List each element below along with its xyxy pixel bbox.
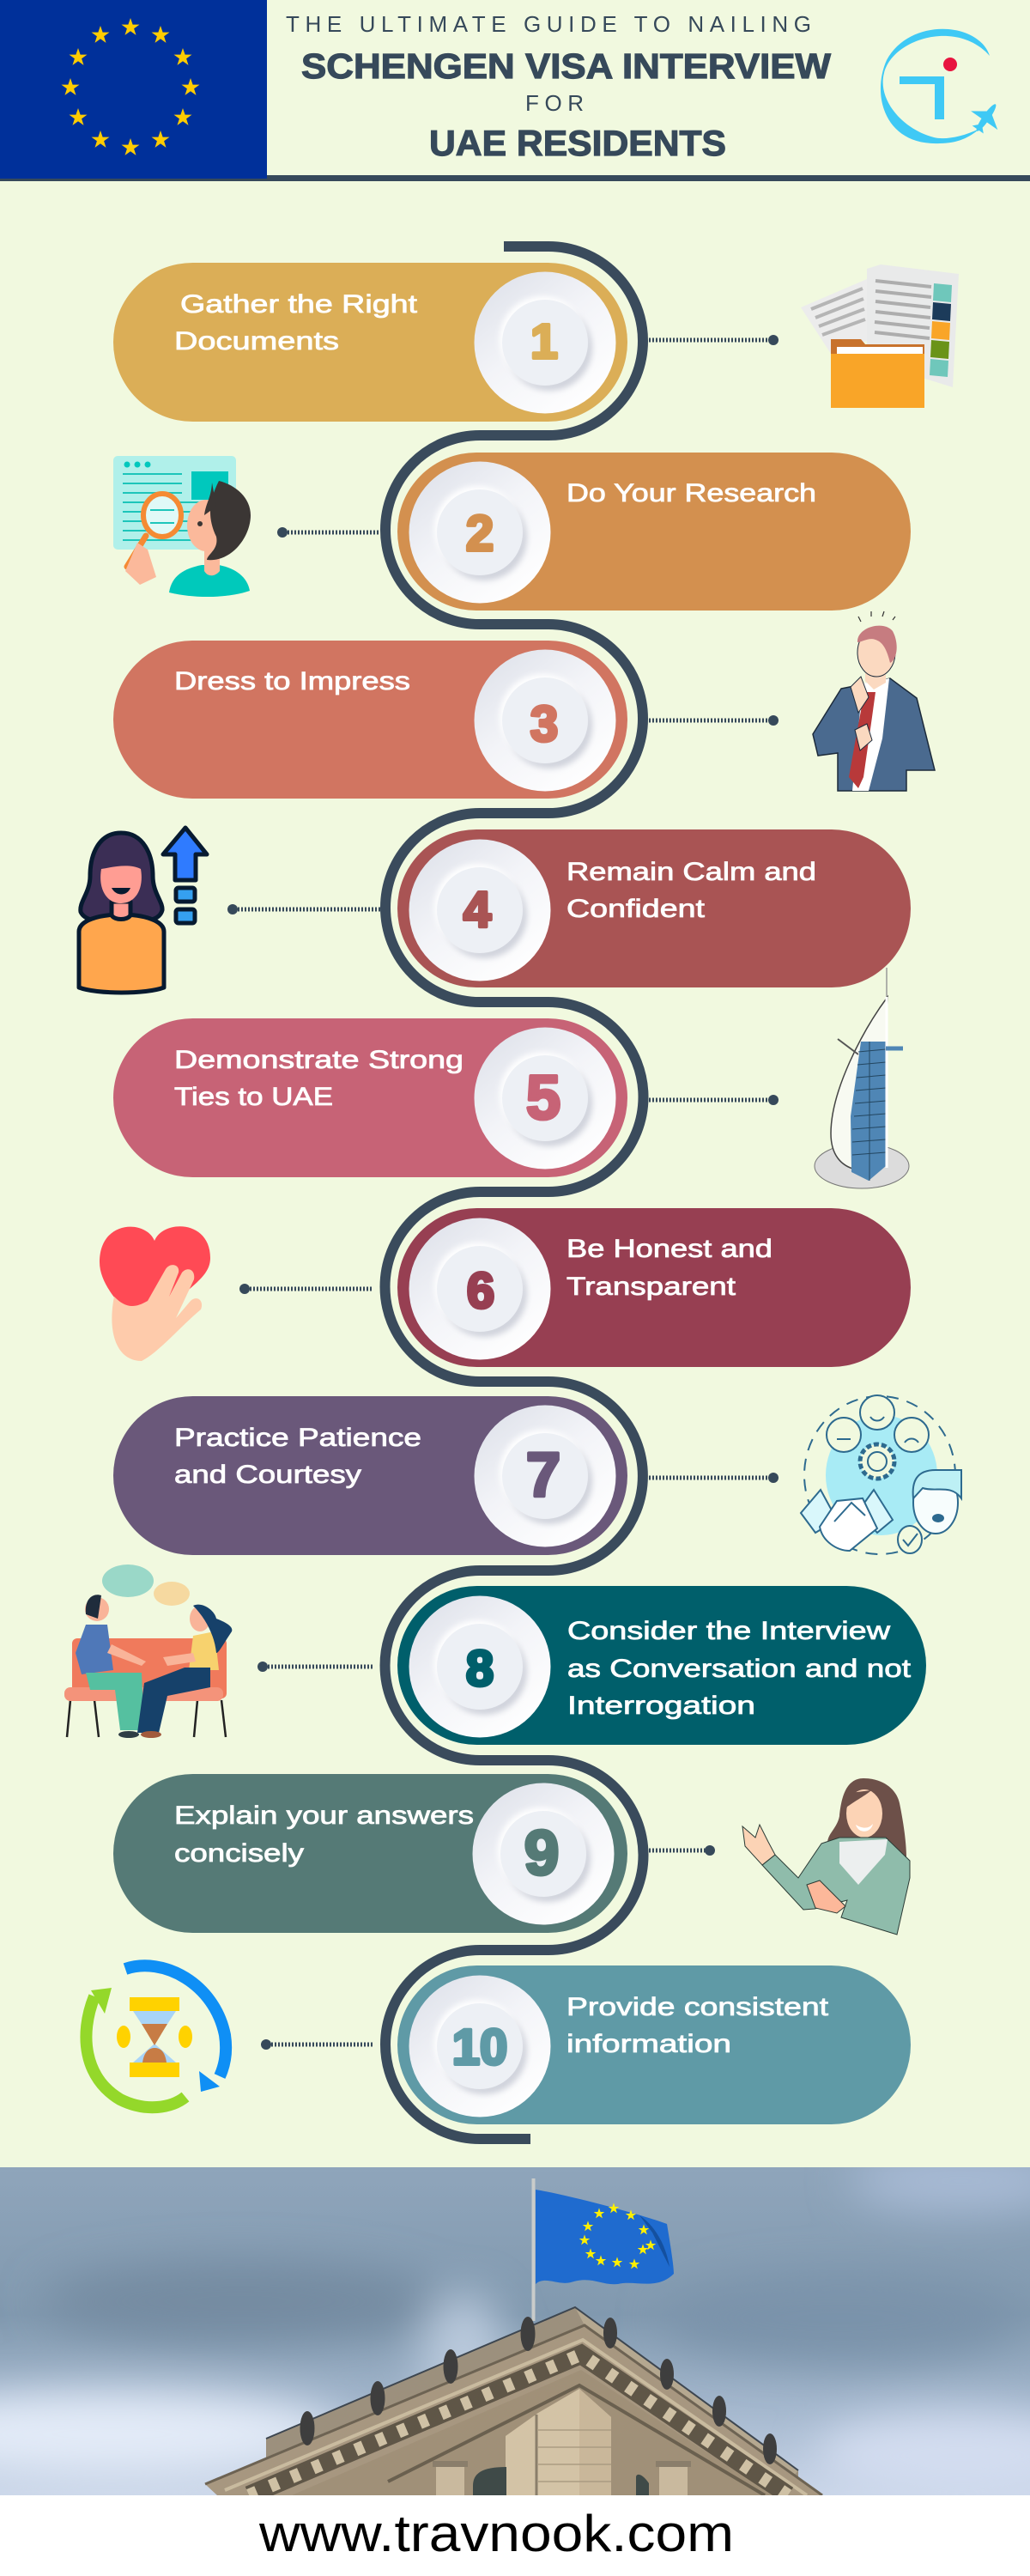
text 4: Confident [566,895,706,923]
text 6 [566,1235,772,1301]
connector 4 [227,904,380,914]
number 5: 5 [526,1064,560,1133]
title: UAE RESIDENTS [429,123,726,163]
pill 1 [113,263,627,422]
pill 3 [113,641,627,799]
text 8: Consider the Interview [567,1617,890,1645]
text 3: Dress to Impress [174,667,410,696]
connector 2 [277,527,380,538]
step 9 [113,1774,910,1935]
sky [0,2151,1030,2499]
text 9: concisely [174,1839,304,1868]
step 2 [113,453,911,611]
text 5: Demonstrate Strong [174,1046,464,1074]
number 2: 2 [466,506,494,562]
step 7 [113,1395,961,1555]
step 4 [79,828,911,993]
text 7 [174,1424,421,1489]
pill 2 [397,453,911,611]
step 5 [113,968,909,1188]
title: FOR [525,90,584,116]
text 9 [174,1801,474,1868]
step 1 [113,263,959,422]
footer [0,2495,1030,2576]
pill 6 [397,1208,911,1367]
pill 10 [397,1965,911,2124]
icon: woman with magnifier [113,456,251,597]
title: SCHENGEN VISA INTERVIEW [301,46,831,86]
pill 8 [397,1586,926,1745]
pill 5 [113,1018,627,1177]
text 1 [174,290,418,355]
text 8 [567,1617,912,1720]
icon: man adjusting tie [813,611,935,791]
title: THE ULTIMATE GUIDE TO NAILING [286,11,811,37]
number 7: 7 [526,1441,560,1510]
header [0,0,1030,181]
connector 1 [649,335,779,345]
text 6: Transparent [566,1273,736,1301]
pill 7 [113,1396,627,1555]
number 10: 10 [452,2020,507,2075]
EU flag [0,0,267,179]
connector 3 [649,715,779,726]
text 4: Remain Calm and [566,858,816,886]
text 8: Interrogation [567,1692,755,1720]
text 8: as Conversation and not [567,1655,912,1683]
icon: travnook logo [881,29,1009,143]
connector 7 [649,1473,779,1483]
icon: woman with up arrow [79,828,207,993]
step 10 [86,1965,911,2124]
icon: Burj Al Arab [815,968,909,1188]
text 5 [174,1046,464,1111]
number 3: 3 [530,696,558,752]
EU flag on pole [536,2190,674,2284]
number 1: 1 [530,314,558,369]
connector 10 [261,2039,373,2050]
pill 4 [397,829,911,987]
icon: hourglass with cycle arrows [86,1965,226,2107]
text 10: Provide consistent [566,1993,829,2021]
text 2: Do Your Research [566,479,816,507]
connector 8 [258,1662,373,1672]
connector 9 [649,1845,715,1856]
text 1: Gather the Right [180,290,418,319]
building [205,2307,822,2495]
text 6: Be Honest and [566,1235,772,1263]
step 6 [100,1208,911,1367]
text 10: information [566,2030,731,2058]
icon: documents and folder [801,264,959,408]
flag pole [532,2178,536,2321]
number 9: 9 [524,1819,559,1888]
serpentine connector [385,246,644,2139]
number 8: 8 [466,1641,494,1697]
website URL: www.travnook.com [258,2505,734,2562]
text 7: and Courtesy [174,1461,361,1489]
icon: woman explaining [742,1778,910,1935]
number 4: 4 [464,882,491,938]
text 4 [566,858,816,923]
header rule [0,175,1030,181]
number 6: 6 [467,1263,494,1319]
icon: feedback faces and handshake [801,1395,961,1554]
step 8 [64,1564,926,1745]
text 9: Explain your answers [174,1801,474,1830]
text 5: Ties to UAE [174,1083,333,1111]
connector 5 [649,1095,779,1105]
text 1: Documents [174,327,339,355]
pill 9 [113,1774,627,1933]
text 10 [566,1993,829,2058]
icon: heart in hand [100,1226,210,1361]
icon: two people talking [64,1564,232,1738]
title [286,11,831,163]
text 7: Practice Patience [174,1424,421,1452]
connector 6 [239,1284,373,1294]
photo: EU flag on building [0,2151,1030,2499]
step 3 [113,611,935,799]
